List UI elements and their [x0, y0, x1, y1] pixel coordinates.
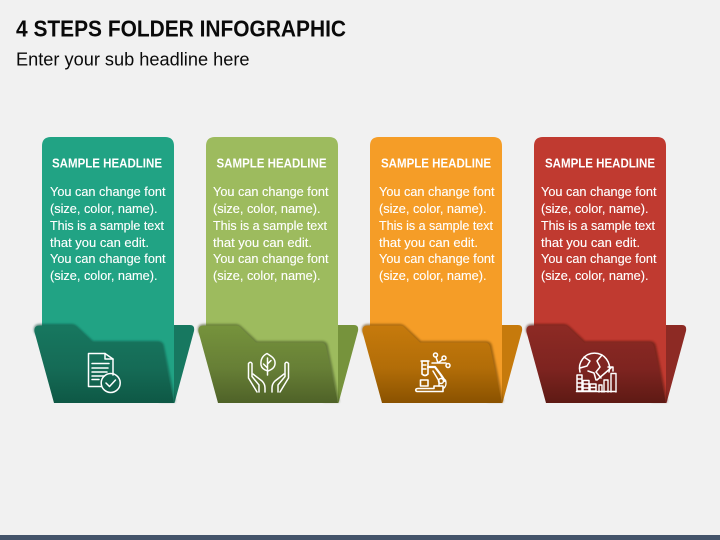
- body text: [379, 185, 495, 283]
- icon: globe with growth chart: [576, 353, 616, 392]
- title: 4 STEPS FOLDER INFOGRAPHIC: [16, 16, 346, 42]
- card: [370, 137, 502, 403]
- folder back flap: [324, 325, 358, 403]
- body text: You can change font: [541, 252, 657, 266]
- folder front: [34, 326, 174, 403]
- folder front: [526, 326, 666, 403]
- folder front: [362, 326, 502, 403]
- subtitle: Enter your sub headline here: [16, 50, 250, 70]
- panel: step 4 red folder: [526, 137, 686, 403]
- body text: [213, 185, 329, 283]
- folder back flap: [652, 325, 686, 403]
- card: [534, 137, 666, 403]
- body text: You can change font: [541, 185, 657, 199]
- body text: that you can edit.: [213, 236, 312, 250]
- body text: You can change font: [50, 185, 166, 199]
- body text: (size, color, name).: [50, 202, 158, 216]
- headline: SAMPLE HEADLINE: [52, 156, 162, 170]
- body text: You can change font: [379, 252, 495, 266]
- body text: This is a sample text: [50, 219, 165, 233]
- body text: You can change font: [50, 252, 166, 266]
- body text: (size, color, name).: [50, 269, 158, 283]
- body text: (size, color, name).: [379, 269, 486, 283]
- body text: [50, 185, 166, 283]
- icon: robotic microscope: [416, 353, 450, 392]
- folder front: [198, 326, 338, 403]
- folder front shadow: [198, 324, 340, 402]
- body text: that you can edit.: [541, 236, 640, 250]
- footer bar: [0, 535, 720, 540]
- panel: step 2 green folder: [198, 137, 358, 403]
- headline: SAMPLE HEADLINE: [381, 156, 491, 170]
- card: [42, 137, 174, 403]
- folder back flap: [160, 325, 194, 403]
- body text: that you can edit.: [379, 236, 478, 250]
- panel: step 1 teal folder: [34, 137, 194, 403]
- body text: This is a sample text: [213, 219, 328, 233]
- folder front shadow: [34, 324, 176, 402]
- body text: [541, 185, 657, 283]
- body text: This is a sample text: [379, 219, 494, 233]
- body text: (size, color, name).: [541, 269, 648, 283]
- card: [206, 137, 338, 403]
- body text: (size, color, name).: [213, 202, 320, 216]
- icon: hands holding leaf: [248, 354, 288, 392]
- icon: document with check: [88, 354, 120, 392]
- body text: (size, color, name).: [541, 202, 648, 216]
- body text: (size, color, name).: [213, 269, 320, 283]
- folder front shadow: [526, 324, 668, 402]
- headline: SAMPLE HEADLINE: [216, 156, 326, 170]
- folder front shadow: [362, 324, 504, 402]
- panel: step 3 orange folder: [362, 137, 522, 403]
- folder back flap: [488, 325, 522, 403]
- body text: You can change font: [213, 185, 329, 199]
- body text: that you can edit.: [50, 236, 149, 250]
- headline: SAMPLE HEADLINE: [545, 156, 655, 170]
- body text: This is a sample text: [541, 219, 656, 233]
- body text: You can change font: [213, 252, 329, 266]
- body text: You can change font: [379, 185, 495, 199]
- body text: (size, color, name).: [379, 202, 486, 216]
